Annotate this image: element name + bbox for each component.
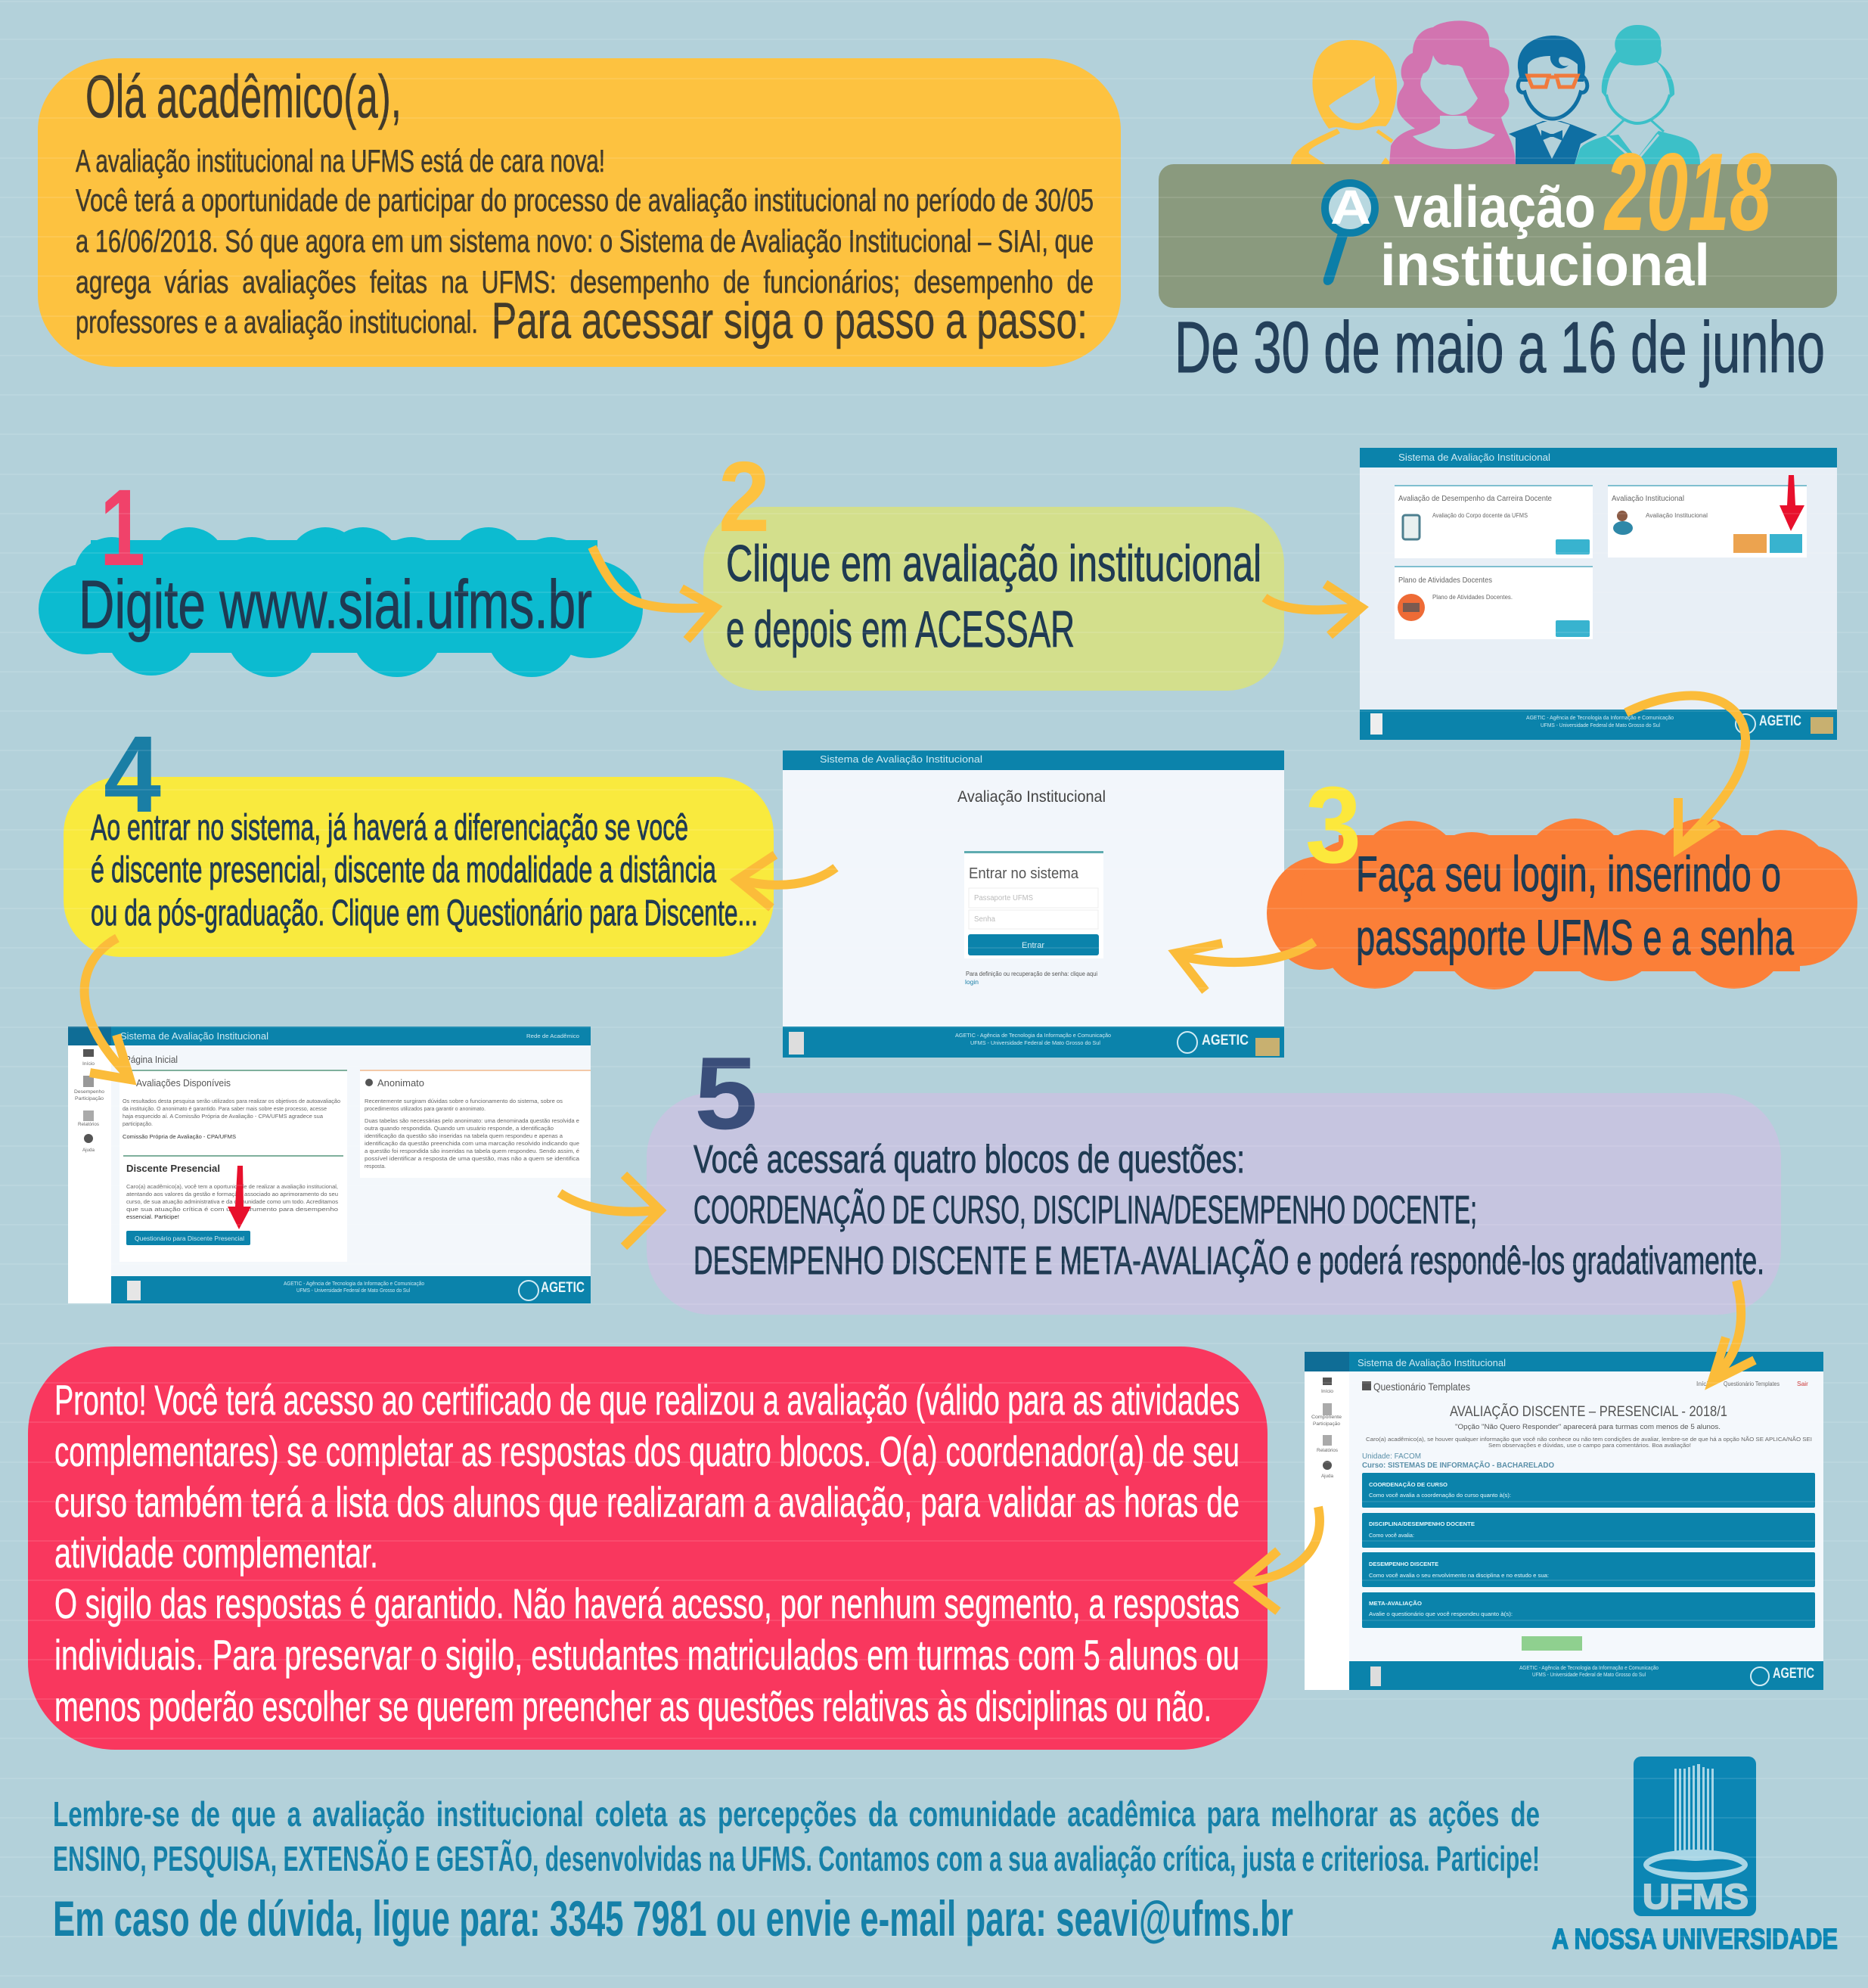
card: avaliações disponíveis: Questionário para Discente Presencial: [135, 1235, 244, 1242]
card: institucional: Avaliação Institucional: [1646, 512, 1708, 519]
icon: teal man: [1575, 25, 1700, 164]
text block: introduction: agrega várias avaliações feitas na UFMS: desempenho de funcionários; desempenho de: [76, 264, 1094, 300]
arrow: login to step 4: [737, 855, 836, 908]
text: conclusion: curso também terá a lista dos alunos que realizaram a avaliação, para validar as horas de: [54, 1478, 1240, 1526]
step number 2: 2: [718, 441, 770, 552]
card: avaliações disponíveis: essencial. Participe!: [126, 1215, 179, 1220]
card: avaliações disponíveis: participação.: [123, 1122, 153, 1127]
panel: step 4: [64, 713, 774, 957]
screenshot: questionnaire: [1305, 1352, 1823, 1690]
panel: campaign logo: [1159, 130, 1837, 308]
card: anonimato: possível identificar a resposta de uma questão, mas não a quem se identifica: [365, 1157, 579, 1162]
screenshot: questionnaire: Ajuda: [1321, 1474, 1334, 1479]
screenshot: questionnaire: Sistema de Avaliação Institucional: [1358, 1357, 1506, 1368]
callout: step by step: Para acessar siga o passo a passo:: [492, 292, 1088, 349]
card: avaliações disponíveis: Discente Presencial: [126, 1163, 220, 1174]
arrow: evaluations to step 5: [560, 1175, 660, 1247]
text: step 5: [694, 1138, 1764, 1283]
card: docente: [1395, 485, 1593, 558]
card: anonimato: a questão foi respondida são inseridas na tabela quem respondeu. Sendo assim, é: [365, 1149, 579, 1154]
text: step 4: [91, 808, 758, 933]
arrow: step 3 to login: [1176, 942, 1314, 991]
panel: conclusion: [28, 1347, 1268, 1750]
arrow: step 5 to questionnaire: [1712, 1281, 1755, 1381]
panel: greeting: [38, 58, 1121, 367]
text block: introduction: A avaliação institucional na UFMS está de cara nova!: [76, 143, 605, 179]
block: meta-avaliação: META-AVALIAÇÃO: [1369, 1600, 1423, 1607]
block: meta-avaliação: [1362, 1592, 1815, 1628]
card: avaliações disponíveis: que sua atuação crítica é com um instrumento para desempenho: [126, 1207, 338, 1213]
text: step 1: Digite www.siai.ufms.br: [79, 567, 592, 643]
card: anonimato: Recentemente surgiram dúvidas sobre o funcionamento do sistema, sobre os: [365, 1099, 563, 1104]
step number 5: 5: [694, 1036, 758, 1151]
text: conclusion: Pronto! Você terá acesso ao certificado de que realizou a avaliação (válido para as atividades: [54, 1376, 1240, 1424]
screenshot: questionnaire: Início: [1696, 1381, 1712, 1387]
text: step 4: Ao entrar no sistema, já haverá a diferenciação se você: [91, 808, 688, 848]
card: anonimato: identificação da questão são inseridas na tabela quem respondeu e apenas a: [365, 1134, 563, 1139]
text block: introduction: a 16/06/2018. Só que agora em um sistema novo: o Sistema de Avaliação Institucional – SIAI, que: [76, 223, 1094, 259]
icon: magnifier: A: [1330, 180, 1371, 235]
card: avaliações disponíveis: [119, 1070, 347, 1262]
screenshot: login: Sistema de Avaliação Institucional: [820, 753, 982, 765]
screenshot: system home: [1360, 448, 1837, 740]
screenshot: questionnaire: AGETIC: [1773, 1666, 1814, 1682]
screenshot: available evaluations: Página Inicial: [125, 1054, 178, 1065]
screenshot: login: [783, 750, 1284, 1058]
icon: red arrow on home screenshot: [1780, 475, 1804, 531]
text block: introduction: Você terá a oportunidade de participar do processo de avaliação institucional no período de 30/05: [76, 182, 1094, 218]
screenshot: available evaluations: AGETIC - Agência de Tecnologia da Informação e Comunicação: [284, 1281, 424, 1287]
card: institucional: [1608, 485, 1807, 558]
heading: login page title: Avaliação Institucional: [957, 788, 1106, 806]
screenshot: questionnaire: "Opção "Não Quero Responder" aparecerá para turmas com menos de 5 alunos.: [1455, 1423, 1721, 1430]
screenshot: questionnaire: Sem observações e dúvidas, use o campo para comentários. Boa avaliação!: [1488, 1443, 1691, 1449]
form: login: Entrar: [1022, 941, 1044, 950]
card: anonimato: resposta.: [365, 1164, 386, 1170]
screenshot: system home: Sistema de Avaliação Institucional: [1398, 452, 1550, 463]
heading: year: 2018: [1603, 130, 1771, 253]
form: login: Entrar no sistema: [969, 865, 1079, 882]
card: anonimato: outra quando respondida. Quando um usuário responde, a identificação: [365, 1126, 554, 1132]
card: anonimato: Anonimato: [377, 1077, 424, 1089]
screenshot: available evaluations: Desempenho: [74, 1090, 105, 1095]
screenshot: login: AGETIC: [1202, 1033, 1249, 1048]
card: plano: Plano de Atividades Docentes.: [1432, 594, 1513, 601]
heading: questionnaire title: AVALIAÇÃO DISCENTE – PRESENCIAL - 2018/1: [1450, 1403, 1727, 1420]
heading: greeting: Olá acadêmico(a),: [85, 63, 402, 130]
screenshot: login: Para definição ou recuperação de senha: clique aqui: [966, 971, 1097, 977]
panel: step 5: [647, 1036, 1781, 1315]
card: docente: Avaliação do Corpo docente da UFMS: [1432, 512, 1528, 519]
card: anonimato: identificação da questão preenchida com uma marcação resolvido indicando que: [365, 1142, 579, 1147]
block: coordenação: [1362, 1473, 1815, 1508]
block: desempenho: [1362, 1552, 1815, 1587]
screenshot: questionnaire: Unidade: FACOM: [1362, 1452, 1421, 1461]
text: step 5: Você acessará quatro blocos de questões:: [694, 1138, 1245, 1182]
screenshot: questionnaire: Sair: [1797, 1381, 1808, 1387]
text: step 4: é discente presencial, discente da modalidade a distância: [91, 850, 716, 890]
text: conclusion: O sigilo das respostas é garantido. Não haverá acesso, por nenhum segmento, a respostas: [54, 1580, 1240, 1627]
step number 1: 1: [100, 467, 145, 589]
icon: yellow woman: [1291, 40, 1397, 164]
screenshot: system home: AGETIC - Agência de Tecnologia da Informação e Comunicação: [1526, 716, 1674, 721]
block: disciplina: DISCIPLINA/DESEMPENHO DOCENTE: [1369, 1522, 1475, 1527]
screenshot: available evaluations: Rede de Acadêmico: [526, 1034, 579, 1039]
screenshot: available evaluations: Ajuda: [82, 1148, 95, 1153]
panel: step 3 cloud: [1267, 764, 1857, 989]
text: conclusion: individuais. Para preservar o sigilo, estudantes matriculados em turmas com 5 alunos ou: [54, 1631, 1240, 1679]
card: anonimato: [360, 1070, 591, 1178]
panel: step 2: [703, 441, 1284, 691]
screenshot: available evaluations: Relatórios: [78, 1123, 99, 1127]
block: disciplina: [1362, 1513, 1815, 1548]
arrow: step 4 to evaluations: [85, 938, 130, 1079]
screenshot: available evaluations: [68, 1027, 591, 1303]
block: desempenho: Como você avalia o seu envolvimento na disciplina e no estudo e sua:: [1369, 1573, 1549, 1579]
card: anonimato: procedimentos utilizados para garantir o anonimato.: [365, 1107, 486, 1112]
screenshot: available evaluations: AGETIC: [541, 1280, 585, 1296]
text: conclusion: menos poderão escolher se querem preencher as questões relativas às disciplinas ou não.: [54, 1682, 1212, 1730]
text: step 2: [726, 535, 1261, 658]
icon: man with glasses: [1509, 36, 1597, 164]
screenshot: questionnaire: Caro(a) acadêmico(a), se houver qualquer informação que você não conhece ou não tem condições de avaliar, lembre-se de que há a opção NÃO SE APLICA/NÃO SEI: [1366, 1436, 1812, 1443]
text: step 2: e depois em ACESSAR: [726, 601, 1075, 658]
screenshot: questionnaire: Questionário Templates: [1373, 1381, 1470, 1393]
text block: introduction: [76, 143, 1094, 340]
card: avaliações disponíveis: Comissão Própria de Avaliação - CPA/UFMS: [123, 1135, 236, 1140]
icon: UFMS logo: [1634, 1757, 1756, 1916]
block: coordenação: Como você avalia a coordenação do curso quanto à(s):: [1369, 1493, 1511, 1499]
text block: closing message: [53, 1794, 1540, 1878]
icon: four people: [1291, 20, 1700, 164]
step number 4: 4: [104, 713, 161, 835]
block: desempenho: DESEMPENHO DISCENTE: [1369, 1562, 1438, 1567]
icon: pink woman: [1389, 20, 1516, 164]
heading: institucional: institucional: [1380, 231, 1710, 298]
screenshot: questionnaire: UFMS - Universidade Federal de Mato Grosso do Sul: [1532, 1673, 1646, 1678]
screenshot: questionnaire: Componente: [1311, 1415, 1342, 1420]
card: plano: Plano de Atividades Docentes: [1398, 576, 1492, 585]
screenshot: questionnaire: Questionário Templates: [1724, 1381, 1780, 1387]
card: avaliações disponíveis: Caro(a) acadêmico(a), você tem a oportunidade de realizar a avaliação institucional,: [126, 1185, 338, 1190]
screenshot: login: UFMS - Universidade Federal de Mato Grosso do Sul: [970, 1041, 1100, 1046]
screenshot: login: AGETIC - Agência de Tecnologia da Informação e Comunicação: [955, 1033, 1111, 1039]
card: anonimato: Duas tabelas são necessárias pelo anonimato: uma denominada questão resolvida e: [365, 1119, 579, 1124]
panel: step 1 cloud: [39, 467, 643, 677]
text: conclusion: [54, 1376, 1240, 1730]
text: step 4: ou da pós-graduação. Clique em Questionário para Discente...: [91, 893, 758, 933]
card: avaliações disponíveis: Avaliações Disponíveis: [136, 1077, 231, 1089]
card: avaliações disponíveis: haja esquecido aí. A Comissão Própria de Avaliação - CPA/UFMS agradece sua: [123, 1114, 323, 1120]
screenshot: system home: AGETIC: [1759, 713, 1801, 729]
screenshot: available evaluations: Sistema de Avaliação Institucional: [120, 1030, 268, 1042]
card: institucional: Avaliação Institucional: [1612, 495, 1684, 503]
card: avaliações disponíveis: curso, de sua atuação administrativa e da comunidade como um todo. Acreditamos: [126, 1200, 339, 1205]
screenshot: system home: UFMS - Universidade Federal de Mato Grosso do Sul: [1541, 723, 1660, 728]
form: login: [964, 851, 1103, 958]
text: step 3: [1356, 846, 1794, 965]
text: conclusion: complementares) se completar as respostas dos quatro blocos. O(a) coordenador(a) de seu: [54, 1427, 1240, 1475]
block: coordenação: COORDENAÇÃO DE CURSO: [1369, 1481, 1448, 1488]
card: plano: [1395, 566, 1593, 639]
arrow: step 2 to screenshot: [1264, 584, 1361, 635]
icon: red arrow on evaluations screenshot: [228, 1166, 251, 1229]
form: login: Senha: [974, 915, 995, 924]
block: meta-avaliação: Avalie o questionário que você respondeu quanto à(s):: [1369, 1612, 1513, 1617]
icon: magnifier: [1323, 180, 1375, 285]
card: avaliações disponíveis: Os resultados desta pesquisa serão utilizados para realizar os objetivos de autoavaliação: [123, 1099, 340, 1104]
form: login: Passaporte UFMS: [974, 894, 1033, 902]
arrow: screenshot to step 3: [1626, 696, 1745, 849]
step number 3: 3: [1305, 764, 1361, 886]
block: disciplina: Como você avalia:: [1369, 1533, 1414, 1539]
text: step 2: Clique em avaliação institucional: [726, 535, 1261, 592]
heading: avaliação: valiação: [1394, 173, 1596, 240]
screenshot: login: login: [965, 979, 979, 986]
arrow: step 1 to 2: [592, 547, 715, 640]
screenshot: available evaluations: Início: [82, 1062, 95, 1067]
card: docente: Avaliação de Desempenho da Carreira Docente: [1398, 495, 1552, 503]
text block: contact: Em caso de dúvida, ligue para: 3345 7981 ou envie e-mail para: seavi@ufms.br: [53, 1890, 1293, 1946]
screenshot: available evaluations: Participação: [75, 1097, 104, 1101]
screenshot: available evaluations: UFMS - Universidade Federal de Mato Grosso do Sul: [296, 1288, 410, 1294]
card: avaliações disponíveis: atentando aos valores da gestão e formação, associado ao aprimoramento do seu: [126, 1192, 338, 1197]
icon: UFMS logo: UFMS: [1643, 1877, 1749, 1916]
card: avaliações disponíveis: da instituição. O anonimato é garantido. Para saber mais sobre este processo, acesse: [123, 1107, 327, 1112]
arrow: questionnaire to conclusion: [1240, 1507, 1320, 1611]
screenshot: questionnaire: Curso: SISTEMAS DE INFORMAÇÃO - BACHARELADO: [1362, 1460, 1554, 1470]
screenshot: questionnaire: AGETIC - Agência de Tecnologia da Informação e Comunicação: [1519, 1666, 1659, 1671]
text block: introduction: professores e a avaliação institucional.: [76, 304, 478, 340]
screenshot: questionnaire: Relatórios: [1317, 1449, 1338, 1453]
text: conclusion: atividade complementar.: [54, 1529, 378, 1576]
screenshot: questionnaire: Início: [1321, 1390, 1334, 1394]
screenshot: questionnaire: Participação: [1313, 1422, 1341, 1427]
